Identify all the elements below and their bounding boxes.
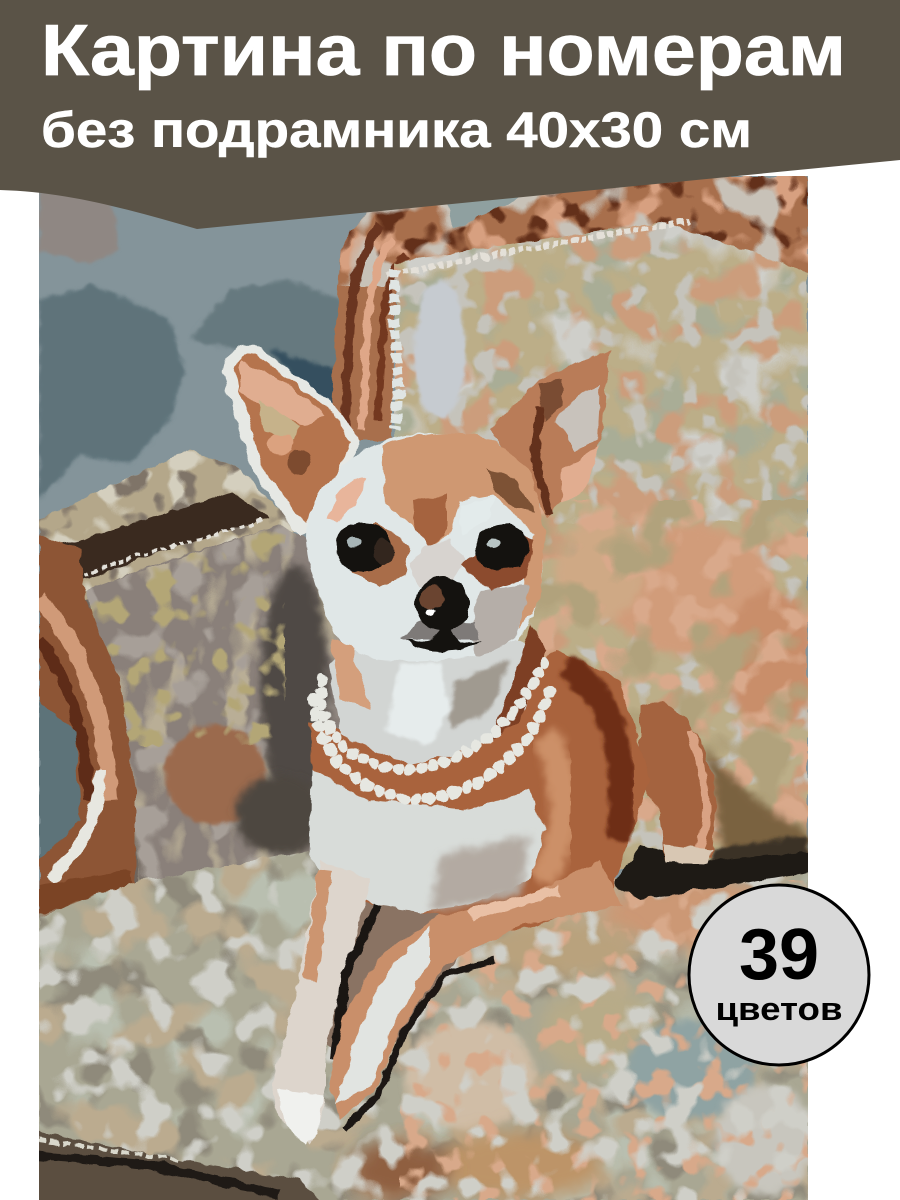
painting: chihuahua on a sofa (20, 160, 830, 1200)
muzzle shadow (400, 620, 478, 640)
dog body (310, 650, 650, 930)
left base fill (85, 599, 148, 883)
header banner (0, 0, 900, 229)
badge: number of colours (689, 885, 869, 1065)
dog head (223, 344, 610, 765)
chin and throat (328, 640, 540, 765)
eye right (475, 524, 529, 570)
sofa seat (30, 850, 830, 1200)
left wooden frame (39, 535, 135, 920)
forehead tan (382, 433, 545, 630)
eye left (335, 522, 391, 572)
badge label: цветов (716, 991, 842, 1027)
subtitle: без подрамника 40х30 см (41, 102, 752, 158)
back cushion (385, 222, 815, 882)
badge number: 39 (739, 915, 819, 995)
pearl necklace (315, 655, 552, 800)
left cushion (85, 525, 345, 885)
left ear (223, 344, 360, 537)
nose (415, 577, 469, 631)
head shape (306, 433, 543, 679)
muzzle grey (410, 540, 465, 585)
left armrest (39, 450, 304, 600)
right ear (490, 350, 610, 517)
mouth (405, 628, 481, 651)
dog front legs (272, 860, 622, 1145)
sofa frame top (330, 176, 808, 440)
title: Картина по номерам (41, 11, 846, 91)
dog hind paw and shadow (615, 702, 830, 900)
painting background wall (39, 176, 808, 909)
